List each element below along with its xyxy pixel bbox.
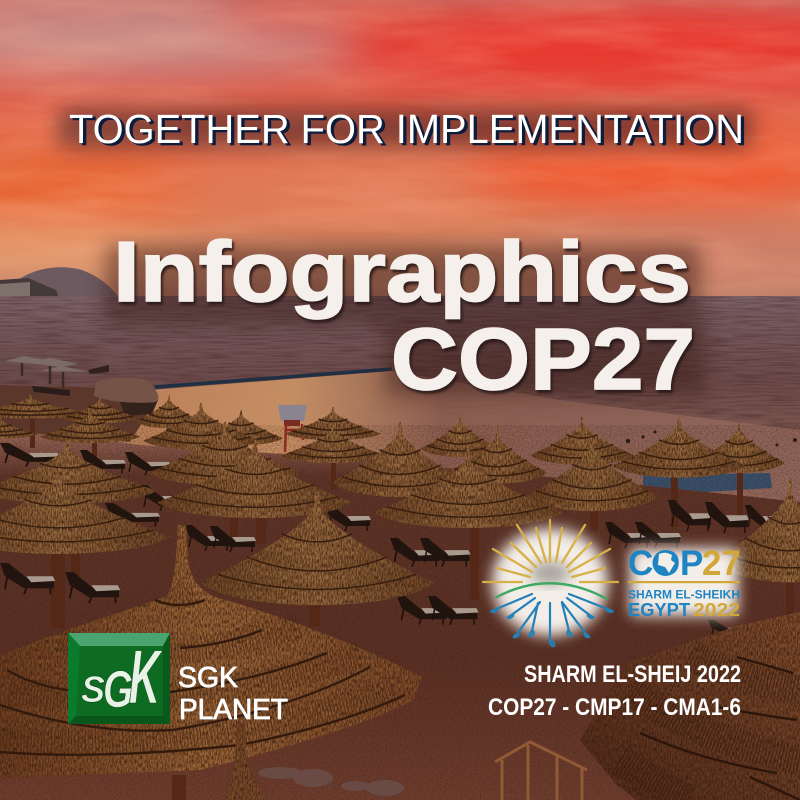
COP27 logo panel <box>483 520 741 646</box>
logo wordmark: 27 <box>702 544 741 583</box>
sea <box>0 296 800 506</box>
heading: Infographics COP27: Infographics <box>113 225 691 320</box>
heading: Infographics COP27 <box>105 225 705 408</box>
sky <box>0 0 800 300</box>
SGK Planet label: SGK <box>178 662 239 694</box>
far row of thatched parasols <box>0 395 785 497</box>
heading: Infographics COP27: COP27 <box>391 311 695 408</box>
logo wordmark: 2022 <box>693 600 740 620</box>
dark glow behind the heading <box>105 245 705 395</box>
SGK italic letters: K <box>129 635 163 720</box>
white glow behind logo <box>492 528 738 636</box>
event caption: SHARM EL-SHEIJ 2022 <box>524 661 741 688</box>
smudge at the logo centre <box>530 562 570 584</box>
middle row of thatched parasols <box>0 422 800 582</box>
icon: sun rays <box>483 520 618 582</box>
parasol poles <box>30 418 794 800</box>
SGK Planet logo <box>68 633 170 724</box>
dark glow behind the title <box>58 108 752 148</box>
sand <box>0 425 800 800</box>
logo wordmark: SHARM EL-SHEIKH <box>628 588 740 602</box>
stair railing <box>495 742 587 800</box>
sunbeds <box>0 443 782 638</box>
icon: blue water roots <box>492 594 612 646</box>
near parasol tip <box>225 722 265 800</box>
front row of thatched parasols <box>0 468 434 605</box>
lifeguard tower <box>278 405 307 452</box>
large foreground parasol, right <box>580 612 800 800</box>
shallow water and shoreline <box>0 371 800 505</box>
SGK Planet label <box>178 662 288 726</box>
distant floating pontoons <box>643 473 772 493</box>
distant mountain and buildings <box>0 267 118 308</box>
title: together for implementation: TOGETHER FOR IMPLEMENTATION <box>72 108 747 154</box>
logo wordmark: EGYPT <box>628 600 690 620</box>
icon: green horizon arc <box>495 583 607 599</box>
green bevelled square <box>68 633 170 724</box>
buoys <box>626 430 797 446</box>
SGK Planet label: PLANET <box>179 694 288 726</box>
left beach head and rock <box>0 365 158 442</box>
title: together for implementation: TOGETHER FOR IMPLEMENTATION <box>69 106 744 152</box>
large foreground parasol <box>0 525 422 778</box>
logo wordmark: COP <box>628 544 703 583</box>
beach huts on the headland <box>5 356 88 396</box>
icon: globe in the logo <box>652 550 678 576</box>
beach stones <box>258 767 404 796</box>
floating boom line <box>155 369 392 387</box>
logo wordmark <box>628 544 741 620</box>
SGK italic letters <box>81 635 163 720</box>
SGK italic letters: S <box>81 669 105 710</box>
event caption: COP27 - CMP17 - CMA1-6 <box>488 694 741 721</box>
event caption <box>488 661 741 721</box>
SGK italic letters: G <box>103 661 133 719</box>
